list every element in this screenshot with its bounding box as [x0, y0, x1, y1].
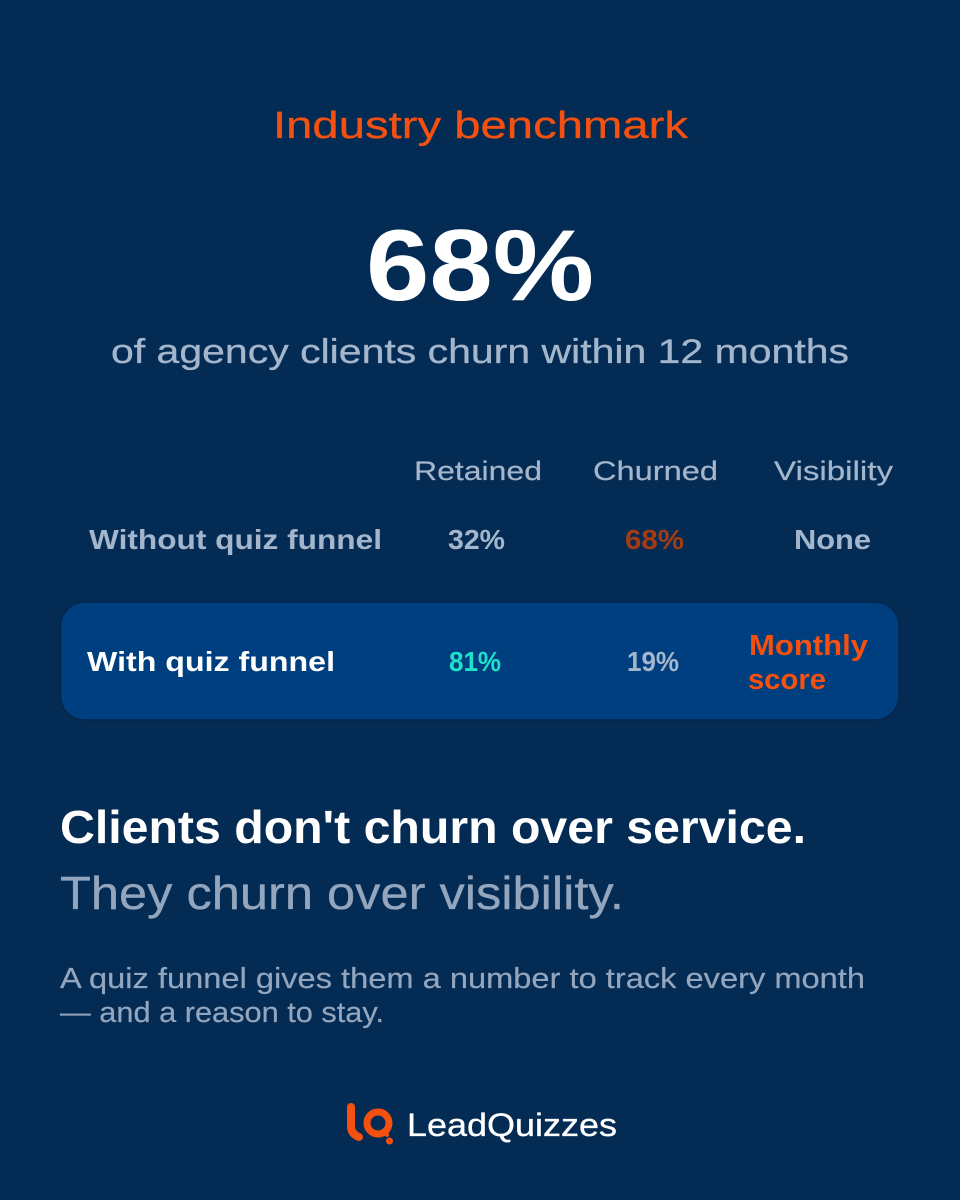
column header: visibility: Visibility: [774, 456, 894, 486]
line two: score: [748, 664, 826, 696]
churned value: 68%: [625, 524, 684, 555]
big stat: 68%: [366, 210, 594, 322]
column header: churned: Churned: [593, 456, 718, 486]
column header: retained: Retained: [414, 456, 542, 486]
comparison table: [60, 456, 899, 720]
churned value: 19%: [627, 646, 679, 677]
row label: With quiz funnel: [87, 646, 335, 677]
icon: LeadQuizzes mark: [351, 1107, 392, 1143]
highlight panel: [60, 602, 899, 720]
retained value: 81%: [449, 646, 501, 677]
stat description: of agency clients churn within 12 months: [111, 333, 849, 371]
wordmark: LeadQuizzes: [407, 1107, 617, 1143]
retained value: 32%: [448, 524, 505, 555]
line one: A quiz funnel gives them a number to track every month: [60, 963, 865, 995]
eyebrow heading: Industry benchmark: [273, 105, 689, 147]
row: with quiz funnel: [60, 602, 899, 720]
logo: [351, 1107, 617, 1143]
line one: Monthly: [749, 630, 868, 662]
row: without quiz funnel: [89, 524, 871, 555]
visibility value: None: [794, 524, 871, 555]
body text: [60, 963, 865, 1029]
row label: Without quiz funnel: [89, 524, 382, 555]
headline: Clients don't churn over service.: [60, 801, 806, 853]
visibility value: [748, 630, 868, 696]
line two: — and a reason to stay.: [60, 997, 384, 1029]
sub headline: They churn over visibility.: [60, 867, 624, 919]
